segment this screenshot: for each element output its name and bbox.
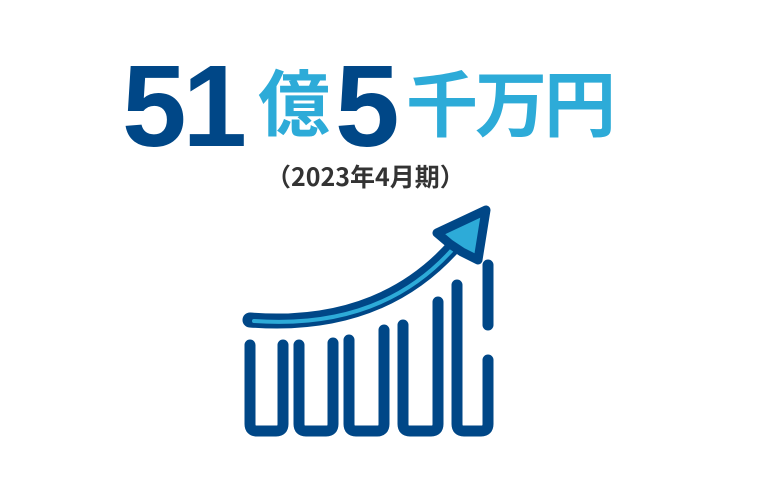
bar 5 (457, 265, 488, 431)
title: amount (122, 41, 613, 171)
arrow (250, 210, 486, 322)
number 5: 5 (335, 41, 400, 171)
bar 2 (299, 343, 333, 431)
number 51: 51 (122, 41, 243, 171)
bar 1 (250, 345, 283, 431)
unit 千万円: 千万円 (406, 47, 613, 152)
subtitle: period: （2023年4月期） (266, 158, 465, 194)
unit 億: 億 (258, 46, 330, 151)
bar 3 (349, 330, 384, 431)
bar 4 (403, 302, 438, 431)
